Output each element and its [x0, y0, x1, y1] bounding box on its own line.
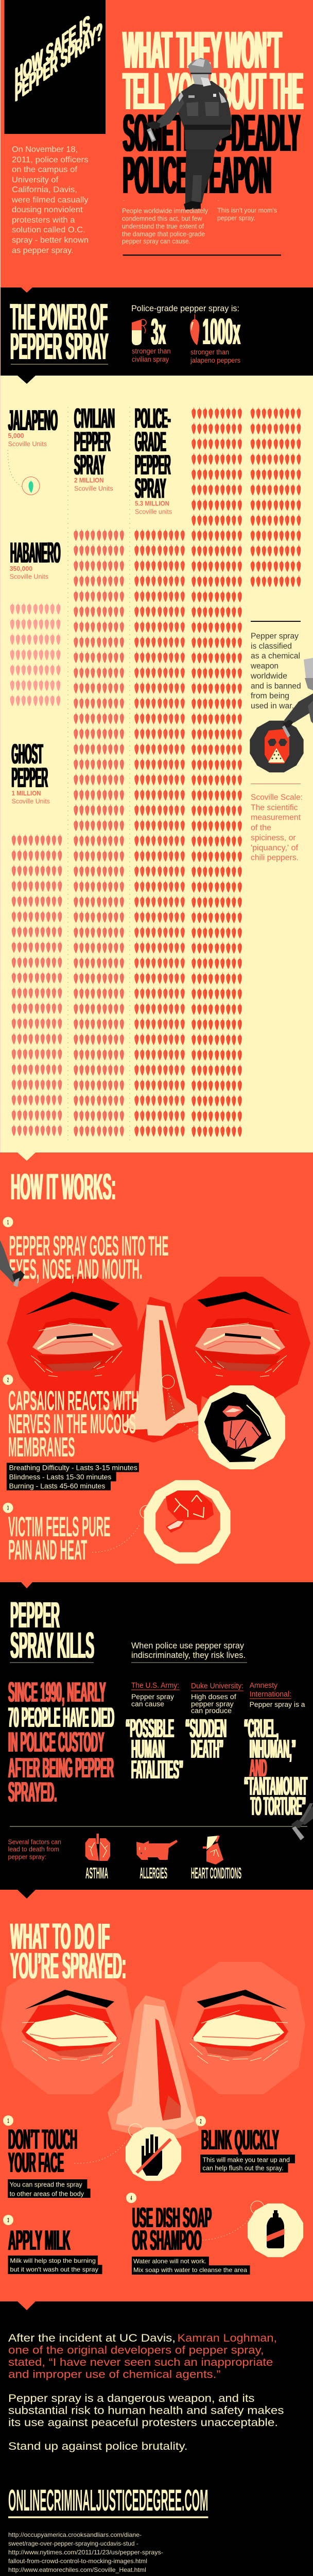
- statistic: 70 people have died: SPRAYED.: [8, 1776, 57, 1808]
- column: jalapeno: [8, 404, 58, 495]
- tip 3: apply milk: Milk will help stop the burning: [10, 2257, 96, 2264]
- stat: 3x stronger than civilian spray: stronger than: [132, 347, 171, 355]
- panel: what to do if you're sprayed: DON’T TOUCH: [8, 2123, 77, 2155]
- column: civilian pepper spray: 2 MILLION: [74, 477, 104, 484]
- panel: scoville comparison: PEPPER: [11, 761, 48, 793]
- tip 2: blink quickly: can help flush out the spray.: [203, 2164, 283, 2172]
- tip 1: don't touch your face: [3, 2115, 91, 2198]
- quote: the u.s. army: [126, 1682, 183, 1784]
- caption: mom's pepper spray: This isn't your mom's: [217, 207, 277, 214]
- text: scoville scale definition: spiciness, or: [251, 834, 296, 842]
- illustration: calm face: [1, 1962, 305, 2138]
- column: ghost pepper: Scoville Units: [11, 798, 50, 805]
- caption: people worldwide: understand the true extent of: [122, 223, 204, 230]
- column: habanero: [10, 536, 61, 580]
- icon: gas mask: [250, 721, 304, 772]
- text: scoville scale definition: The scientific: [251, 804, 298, 812]
- text: closing argument: its use against peaceful protesters unacceptable.: [8, 2417, 278, 2429]
- panel: pepper spray kills: FATALITIES”: [131, 1755, 183, 1784]
- panel: scoville comparison: SPRAY: [74, 449, 105, 481]
- caption: people worldwide: People worldwide immediately: [122, 207, 208, 214]
- chart: police-grade spray peppers column 1: [134, 529, 186, 1140]
- text: sources: http://www.nytimes.com/2011/11/23/us/pepper-sprays-: [8, 2549, 163, 2556]
- subheading: risk lives: [131, 1641, 246, 1660]
- quote: duke university: pepper spray: [191, 1700, 234, 1708]
- caption: mom's pepper spray: pepper spray.: [217, 214, 255, 222]
- step 1: [3, 1217, 169, 1285]
- text: sources: sweet/rage-over-pepper-spraying-ucdavis-stud -: [8, 2540, 138, 2547]
- caption: mom's pepper spray: [217, 198, 277, 222]
- panel: what to do if you're sprayed: [0, 1890, 313, 2301]
- statistic: 70 people have died: [8, 1676, 114, 1808]
- step 2: 2: [7, 1377, 9, 1384]
- text: sources: [8, 2531, 168, 2576]
- tip 4: use dish soap or shampoo: [126, 2193, 250, 2275]
- tip 2: blink quickly: This will make you tear up and: [203, 2156, 290, 2164]
- quote: amnesty international: [244, 1682, 307, 1821]
- panel: pepper spray kills: [1, 1582, 313, 1890]
- column: habanero: 350,000: [10, 565, 32, 572]
- photo: officer arm spraying: [0, 1240, 25, 1287]
- stat lead text: Police-grade pepper spray is:: [131, 303, 239, 313]
- icon: heart conditions: [191, 1836, 241, 1882]
- panel: the power of pepper spray header: THE POWER OF: [10, 296, 108, 338]
- tip 4: use dish soap or shampoo: Water alone will not work.: [133, 2258, 206, 2265]
- panel: introduction: [0, 0, 313, 1153]
- column: habanero: Scoville Units: [10, 573, 48, 580]
- panel: scoville comparison: GHOST: [11, 738, 43, 770]
- text: scoville scale definition: Scoville Scale:: [251, 793, 303, 802]
- text: kamran loghman statement: stated, “I have never seen such an inappropriate: [8, 2357, 273, 2368]
- intro paragraph: protesters with a: [12, 216, 75, 225]
- panel: the power of pepper spray header: 3x: [151, 312, 166, 352]
- column: police-grade pepper spray: Scoville units: [135, 508, 172, 515]
- panel: pepper spray kills: SINCE 1990, NEARLY: [8, 1676, 106, 1708]
- photo: police officer with pepper spray: [145, 58, 232, 210]
- intro paragraph: On November 18,: [12, 145, 78, 154]
- illustration: nose and airways: [198, 1385, 285, 1469]
- quote: duke university: can produce: [191, 1707, 232, 1715]
- panel: what to do if you're sprayed: WHAT TO DO IF: [10, 1917, 110, 1957]
- brand: website: [8, 2484, 208, 2518]
- text: kamran loghman statement: Kamran Loghman,: [177, 2332, 277, 2344]
- panel: scoville comparison: SPRAY: [135, 472, 166, 504]
- column: police-grade pepper spray: [135, 402, 172, 515]
- chart: police-grade spray peppers column 2: [192, 407, 243, 1140]
- text: chemical weapon fact: from being: [251, 691, 289, 701]
- illustration: burning face: [7, 1277, 310, 1443]
- arrow: section pointer: [18, 1890, 36, 1899]
- icon: asthma lungs: [85, 1834, 110, 1882]
- panel: scoville comparison: GRADE: [135, 426, 166, 457]
- quote: duke university: Duke University:: [191, 1682, 244, 1690]
- intro paragraph: solution called O.C.: [12, 226, 85, 234]
- text: kamran loghman statement: one of the original developers of pepper spray,: [8, 2344, 264, 2357]
- quote: amnesty international: AND: [250, 1755, 267, 1782]
- quote: duke university: DEATH”: [191, 1734, 223, 1764]
- panel: scoville comparison: HABANERO: [10, 536, 61, 569]
- text: kamran loghman statement: and improper use of chemical agents.”: [8, 2369, 221, 2380]
- text: chemical weapon fact: and is banned: [251, 682, 301, 690]
- chart: police-grade spray peppers column 3: [250, 407, 302, 590]
- step 3: 3: [7, 1504, 9, 1512]
- text: scoville scale definition: chili peppers.: [251, 853, 299, 862]
- text: sources: fallout-from-crowd-control-to-mocking-images.html: [8, 2557, 147, 2565]
- stat: 3x stronger than civilian spray: civilian spray: [132, 355, 169, 363]
- text: factors lead to death: pepper spray:: [8, 1854, 46, 1861]
- caption: people worldwide: -: [123, 198, 125, 203]
- caption: people worldwide: condemned this act, but few: [122, 215, 202, 223]
- caption: mom's pepper spray: -: [218, 198, 219, 203]
- arrow: section pointer: [18, 1153, 36, 1161]
- text: scoville scale definition: 'piquancy,' of: [251, 844, 299, 852]
- arrow: section pointer: [18, 2301, 36, 2310]
- panel: pepper spray kills: SPRAY KILLS: [10, 1625, 94, 1666]
- label: symptom durations: Breathing Difficulty - Lasts 3-15 minutes: [9, 1463, 137, 1471]
- quote: duke university: High doses of: [191, 1693, 236, 1701]
- subheading: risk lives: indiscriminately, they risk lives.: [131, 1651, 246, 1660]
- quote: the u.s. army: HUMAN: [131, 1734, 165, 1764]
- intro paragraph: University of: [12, 176, 59, 184]
- step 1: 1: [7, 1219, 9, 1226]
- panel: scoville comparison: POLICE-: [135, 402, 171, 434]
- text: scoville scale definition: [251, 793, 303, 862]
- quote: the u.s. army: Pepper spray: [131, 1693, 174, 1701]
- arrow: section pointer: [21, 287, 32, 293]
- panel: pepper spray kills: 70 PEOPLE HAVE DIED: [8, 1701, 114, 1733]
- text: factors lead to death: lead to death from: [8, 1845, 59, 1853]
- column: jalapeno: 5,000: [8, 432, 24, 439]
- stat: 1000x stronger than jalapeno peppers: stronger than: [190, 348, 229, 356]
- text: chemical weapon fact: weapon: [250, 662, 279, 671]
- panel: scoville comparison: CIVILIAN: [74, 402, 115, 434]
- heading: what to do: [10, 1917, 126, 1987]
- illustration: brain and mouth: [93, 1480, 231, 1564]
- panel: the power of pepper spray header: 1000x: [203, 312, 240, 352]
- panel: pepper spray kills: IN POLICE CUSTODY: [8, 1726, 104, 1758]
- intro paragraph: on the campus of: [12, 165, 78, 174]
- step 3: [3, 1503, 110, 1566]
- stat: 1000x stronger than jalapeno peppers: jalapeno peppers: [190, 357, 240, 364]
- text: sources: http://www.eatmorechiles.com/Scoville_Heat.html: [8, 2566, 146, 2573]
- panel: scoville comparison: JALAPENO: [8, 404, 58, 437]
- text: chemical weapon fact: [250, 632, 301, 710]
- heading: pepper spray kills: PEPPER: [10, 1595, 60, 1636]
- tip 4: use dish soap or shampoo: Mix soap with water to cleanse the area: [133, 2266, 247, 2274]
- panel: how it works: HOW IT WORKS:: [11, 1167, 116, 1208]
- quote: amnesty international: International:: [250, 1690, 291, 1699]
- caption: people worldwide: pepper spray can cause.: [122, 238, 190, 245]
- icon: no touching hand: [75, 2124, 181, 2181]
- intro paragraph: California, Davis,: [12, 185, 77, 194]
- tip 1: don't touch your face: You can spread the spray: [10, 2181, 83, 2189]
- text: factors lead to death: [8, 1838, 61, 1861]
- text: closing argument: substantial risk to human health and safety makes: [8, 2405, 284, 2416]
- step 2: [3, 1375, 139, 1463]
- panel: scoville comparison: [1, 376, 313, 1153]
- quote: amnesty international: Amnesty: [250, 1682, 278, 1690]
- label: symptom durations: [7, 1463, 139, 1490]
- panel: pepper spray kills: “SUDDEN: [185, 1714, 227, 1743]
- panel: pepper spray kills: “POSSIBLE: [126, 1714, 174, 1743]
- main heading: [123, 21, 303, 205]
- panel: how it works: PAIN AND HEAT: [8, 1534, 87, 1566]
- text: chemical weapon fact: is classified: [251, 642, 292, 651]
- column: ghost pepper: [11, 738, 50, 805]
- icon: shampoo bottle: [203, 2201, 303, 2257]
- text: scoville scale definition: measurement: [251, 813, 301, 822]
- panel: the power of pepper spray header: [1, 287, 313, 376]
- chart: civilian spray peppers: [74, 529, 125, 1140]
- intro paragraph: 2011, police officers: [12, 156, 89, 164]
- text: chemical weapon fact: as a chemical: [251, 652, 300, 660]
- panel: what to do if you're sprayed: YOUR FACE: [8, 2146, 64, 2178]
- subheading: risk lives: When police use pepper spray: [131, 1641, 245, 1651]
- text: kamran loghman statement: [8, 2332, 277, 2380]
- tip 4: use dish soap or shampoo: 4: [131, 2195, 132, 2202]
- stat: 1000x stronger than jalapeno peppers: [190, 312, 240, 364]
- column: civilian pepper spray: Scoville Units: [74, 485, 113, 493]
- tip 1: don't touch your face: to other areas of the body: [10, 2191, 84, 2198]
- text: kamran loghman statement: After the incident at UC Davis,: [8, 2332, 176, 2344]
- text: closing argument: Pepper spray is a dangerous weapon, and its: [8, 2393, 254, 2404]
- panel: how it works: VICTIM FEELS PURE: [8, 1511, 110, 1543]
- photo: officer spraying mask: [282, 658, 313, 738]
- column: jalapeno: Scoville Units: [8, 440, 47, 448]
- text: chemical weapon fact: worldwide: [250, 672, 287, 681]
- text: sources: http://occupyamerica.crooksandliars.com/diane-: [8, 2531, 142, 2538]
- photo: officer arm with can: [291, 1803, 313, 1840]
- quote: amnesty international: Pepper spray is a: [250, 1701, 305, 1708]
- arrow: section pointer: [21, 1582, 32, 1588]
- intro paragraph: spray - better known: [12, 236, 89, 245]
- caption: people worldwide: [122, 198, 208, 245]
- caption: people worldwide: the damage that police-grade: [122, 231, 205, 238]
- text: scoville scale definition: of the: [251, 823, 271, 833]
- text: closing argument: Stand up against police brutality.: [8, 2441, 187, 2452]
- tip 1: don't touch your face: 1: [7, 2117, 9, 2125]
- tip 2: blink quickly: [196, 2116, 295, 2173]
- panel: scoville comparison: PEPPER: [74, 426, 110, 457]
- stat: 3x stronger than civilian spray: [132, 312, 171, 363]
- intro paragraph: were filmed casually: [11, 196, 89, 205]
- chart: habanero peppers: [10, 602, 62, 709]
- quote: the u.s. army: can cause: [131, 1700, 164, 1708]
- arrow: section pointer: [18, 376, 36, 384]
- intro paragraph: [11, 145, 89, 255]
- panel: scoville comparison: PEPPER: [135, 449, 171, 481]
- tip 3: apply milk: but it won't wash out the spray: [10, 2266, 98, 2273]
- column: ghost pepper: 1 MILLION: [11, 790, 41, 797]
- tip 3: apply milk: [3, 2215, 102, 2274]
- heading: pepper spray kills: [10, 1595, 94, 1666]
- label: symptom durations: Blindness - Lasts 15-30 minutes: [9, 1472, 111, 1481]
- quote: duke university: [185, 1682, 244, 1764]
- chart: ghost pepper peppers: [11, 834, 63, 1139]
- label: symptom durations: Burning - Lasts 45-60 minutes: [9, 1482, 105, 1490]
- tip 2: blink quickly: 2: [200, 2117, 202, 2125]
- text: closing argument: [8, 2393, 284, 2452]
- tip 3: apply milk: 3: [7, 2216, 9, 2224]
- text: chemical weapon fact: used in war.: [251, 702, 294, 710]
- text: factors lead to death: Several factors can: [8, 1838, 61, 1845]
- text: chemical weapon fact: Pepper spray: [251, 632, 299, 641]
- panel: how it works: [0, 1153, 313, 1582]
- quote: the u.s. army: The U.S. Army:: [131, 1682, 179, 1690]
- intro paragraph: dousing nonviolent: [12, 206, 83, 214]
- tip 3: apply milk: APPLY MILK: [8, 2224, 71, 2256]
- panel: pepper spray kills: ALLERGIES: [140, 1865, 167, 1882]
- panel: pepper spray kills: ASTHMA: [85, 1865, 108, 1882]
- panel: conclusion: [0, 2301, 313, 2576]
- icon: allergies cat: [136, 1840, 178, 1882]
- intro paragraph: as pepper spray.: [12, 246, 73, 255]
- column: police-grade pepper spray: 5.3 MILLION: [135, 500, 169, 507]
- title card: how safe is pepper spray: [4, 0, 106, 134]
- column: civilian pepper spray: [74, 402, 115, 493]
- panel: the power of pepper spray header: PEPPER SPRAY: [10, 326, 108, 367]
- heading: the power of pepper spray: [10, 296, 108, 367]
- step 2: MEMBRANES: [8, 1432, 75, 1463]
